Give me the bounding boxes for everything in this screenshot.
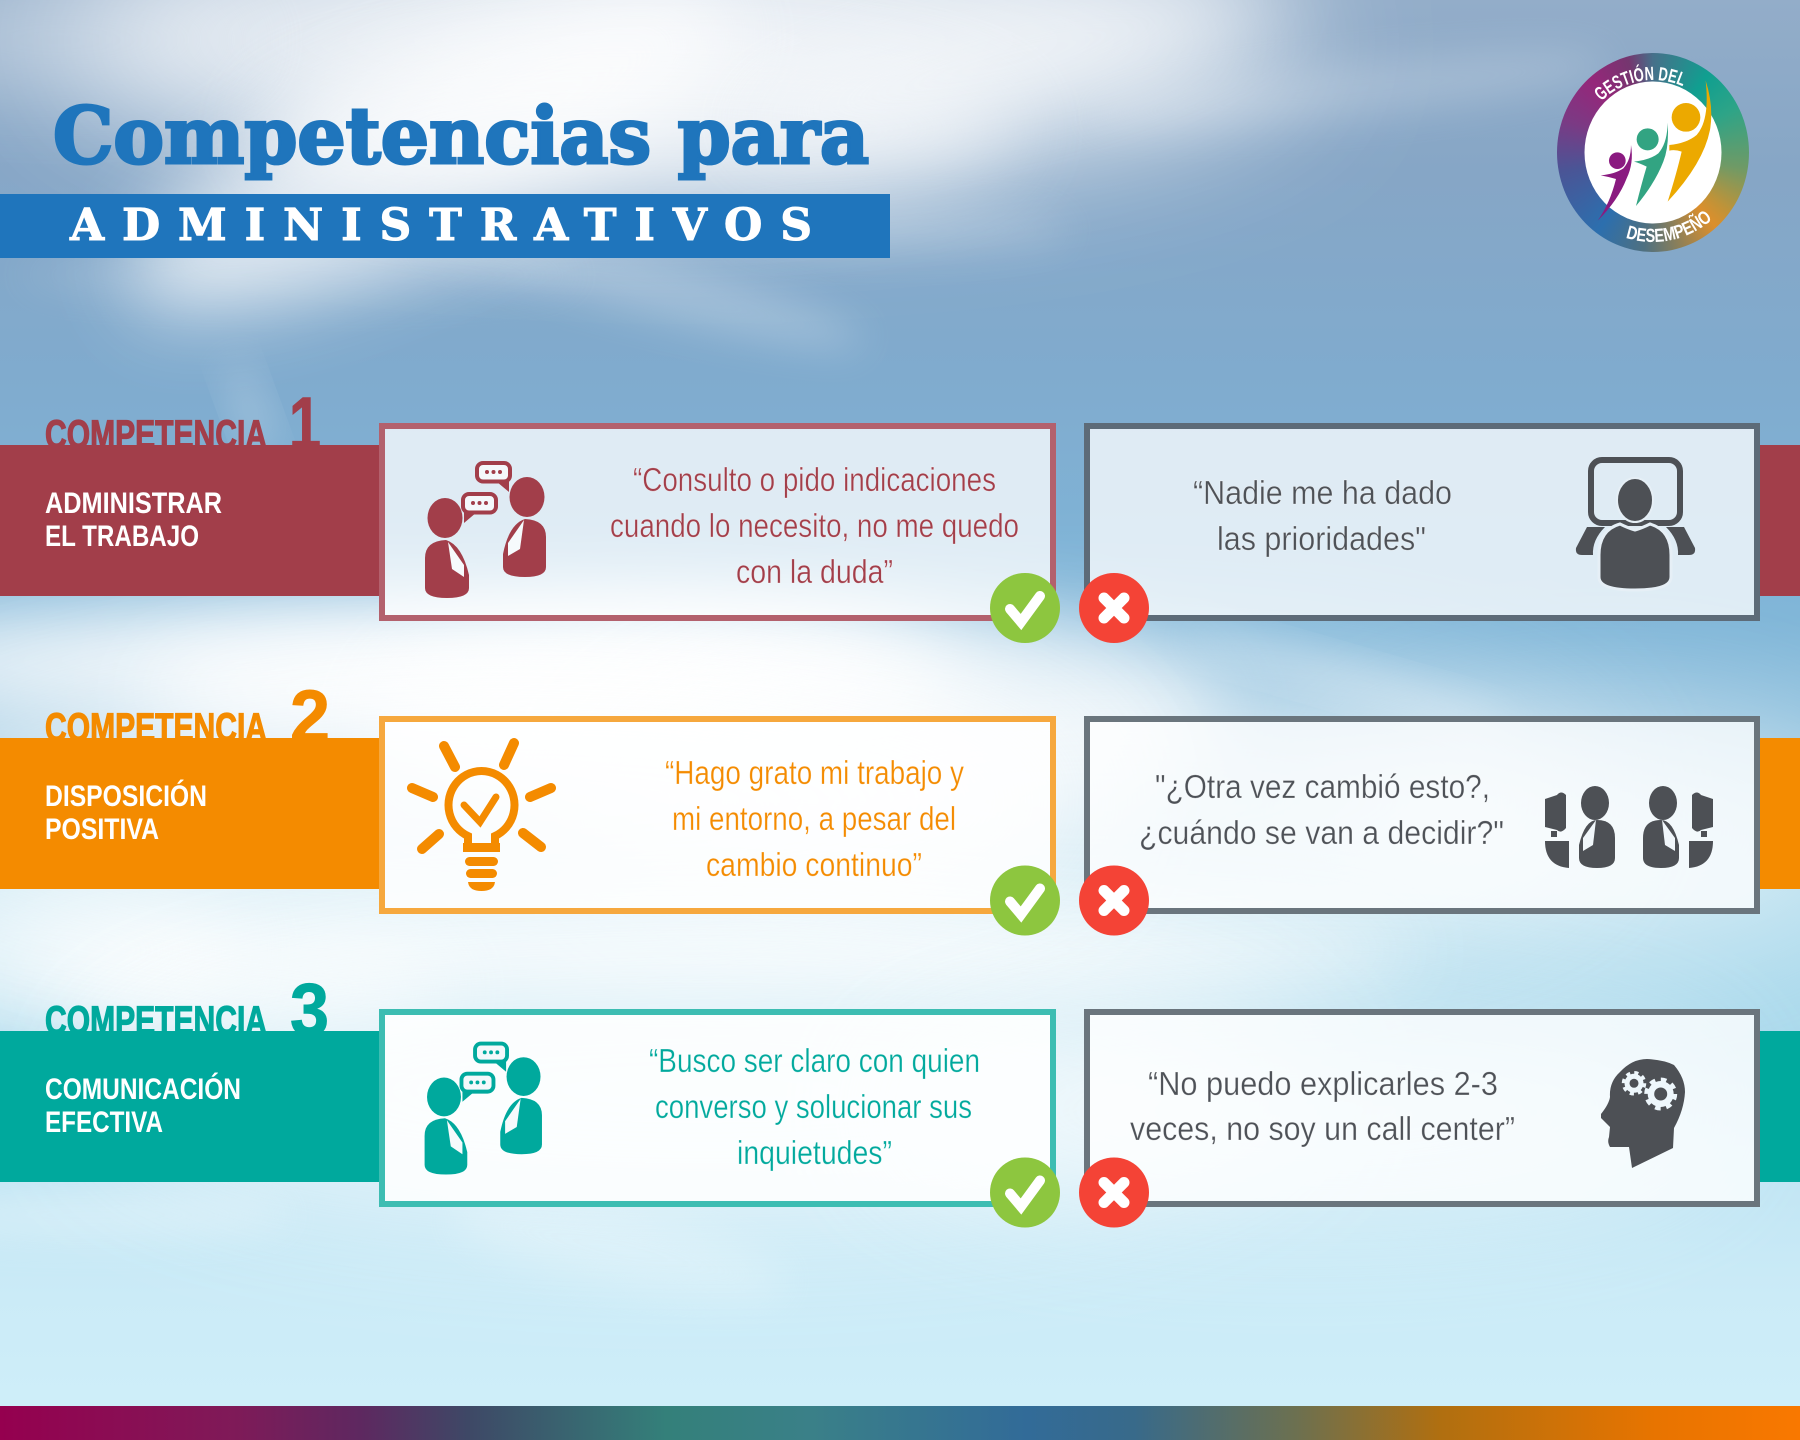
competencia 1 negative panel: las prioridades" xyxy=(1217,520,1426,557)
competencia 1 negative panel: “Nadie me ha dado xyxy=(1193,474,1452,511)
icon: two people talking xyxy=(425,1044,542,1175)
icon: check 1 xyxy=(990,573,1060,643)
competencia 3 positive panel xyxy=(382,1012,1053,1204)
competencia 2 band xyxy=(0,738,1800,889)
competencia 3 band: COMUNICACIÓN xyxy=(45,1072,241,1106)
icon: cross 2 xyxy=(1079,866,1149,936)
competencia 3 header: COMPETENCIA xyxy=(45,999,267,1043)
competencia 3 negative panel: veces, no soy un call center” xyxy=(1130,1110,1515,1147)
competencia 2 positive panel: cambio continuo” xyxy=(706,846,922,883)
title: Competencias para xyxy=(53,91,869,182)
competencia 1 header: COMPETENCIA xyxy=(45,413,267,457)
competencia 2 header xyxy=(45,675,330,758)
competencia 2 positive panel: mi entorno, a pesar del xyxy=(672,800,956,837)
competencia 3 negative panel: “No puedo explicarles 2-3 xyxy=(1148,1065,1498,1102)
competencia 2 band: POSITIVA xyxy=(45,813,159,846)
competencia 1 positive panel: “Consulto o pido indicaciones xyxy=(633,461,996,498)
icon: two people at desks xyxy=(1545,786,1713,868)
competencia 1 header xyxy=(45,382,321,465)
competencia 3 positive panel: converso y solucionar sus xyxy=(655,1088,972,1125)
icon: person in front of screen xyxy=(1576,460,1695,590)
competencia 3 header xyxy=(45,968,329,1051)
icon: cross 1 xyxy=(1079,573,1149,643)
icon: light bulb xyxy=(412,743,551,891)
competencia 3 band: EFECTIVA xyxy=(45,1106,163,1139)
competencia 1 band: EL TRABAJO xyxy=(45,520,199,553)
logo: DESEMPEÑO xyxy=(1626,211,1710,242)
competencia 2 negative panel xyxy=(1087,719,1757,911)
competencia 3 positive panel: “Busco ser claro con quien xyxy=(649,1042,980,1079)
icon: cross 3 xyxy=(1079,1158,1149,1228)
competencia 3 positive panel: inquietudes” xyxy=(737,1134,892,1171)
competencia 2 negative panel: "¿Otra vez cambió esto?, xyxy=(1155,768,1490,805)
icon: two people talking xyxy=(425,463,546,598)
icon: check 3 xyxy=(990,1158,1060,1228)
competencia 1 negative panel xyxy=(1087,426,1757,618)
subtitle bar xyxy=(0,194,890,258)
competencia 3 negative panel xyxy=(1087,1012,1757,1204)
competencia 1 band xyxy=(0,445,1800,596)
competencia 1 header: 1 xyxy=(289,382,321,465)
competencia 2 header: COMPETENCIA xyxy=(45,706,267,750)
icon: check 2 xyxy=(990,866,1060,936)
competencia 1 positive panel: cuando lo necesito, no me quedo xyxy=(610,507,1019,544)
competencia 2 positive panel xyxy=(382,719,1053,911)
logo ring: colour wheel xyxy=(1557,53,1749,252)
competencia 2 positive panel: “Hago grato mi trabajo y xyxy=(665,754,964,791)
competencia 3 band xyxy=(0,1031,1800,1182)
subtitle bar: ADMINISTRATIVOS xyxy=(69,200,812,251)
competencia 3 header: 3 xyxy=(290,968,329,1051)
icon: head with gears xyxy=(1601,1059,1685,1168)
logo: GESTIÓN DEL xyxy=(1594,64,1684,100)
competencia 2 band: DISPOSICIÓN xyxy=(45,779,207,813)
competencia 2 negative panel: ¿cuándo se van a decidir?" xyxy=(1139,814,1504,851)
logo xyxy=(1584,64,1722,242)
competencia 1 band: ADMINISTRAR xyxy=(45,487,222,520)
bottom gradient strip xyxy=(0,1406,1800,1440)
competencia 2 header: 2 xyxy=(290,675,330,758)
competencia 1 positive panel xyxy=(382,426,1053,618)
competencia 1 positive panel: con la duda” xyxy=(736,553,893,590)
